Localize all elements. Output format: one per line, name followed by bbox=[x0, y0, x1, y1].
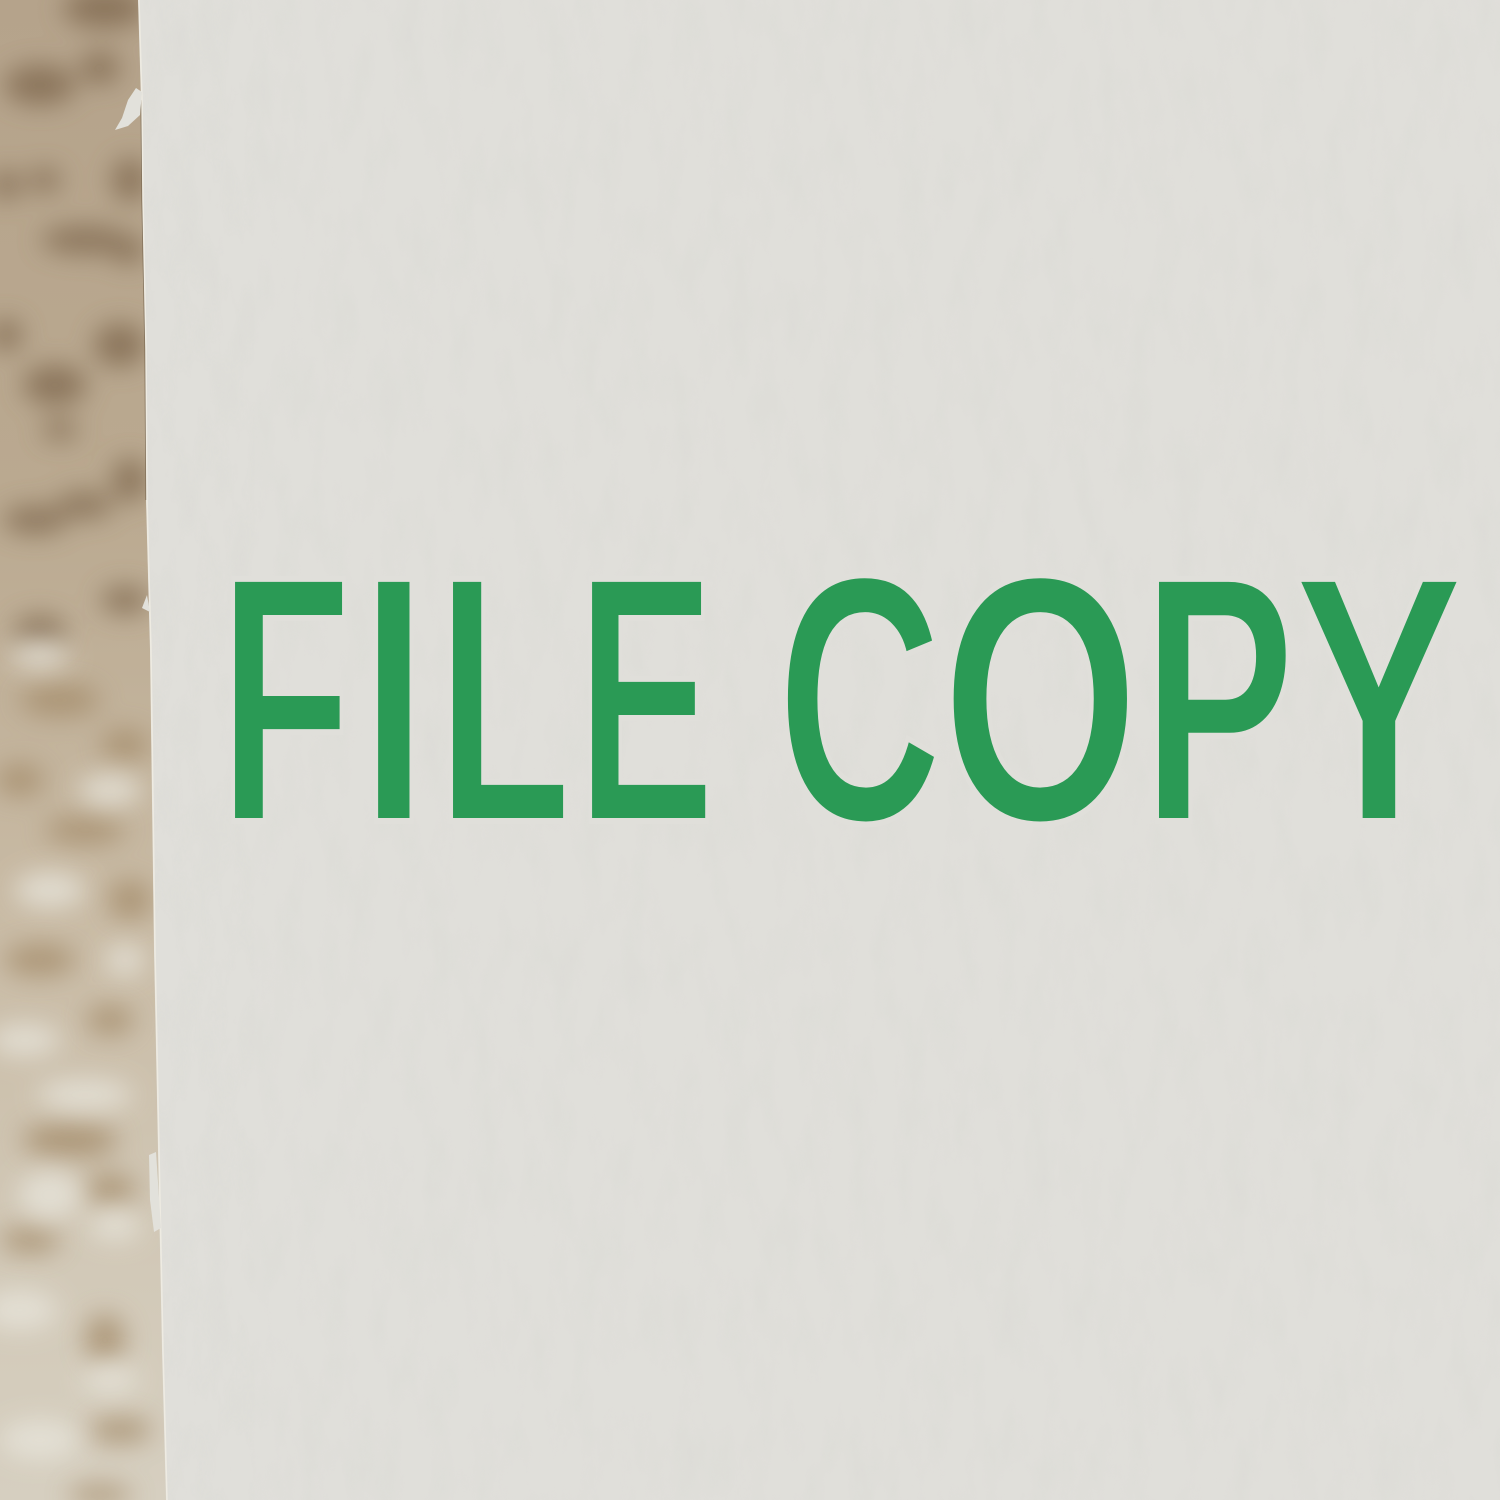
stamped text: FILE COPY: C bbox=[776, 502, 943, 896]
stamped text: FILE COPY: I bbox=[360, 502, 428, 896]
torn paper fibres bbox=[115, 88, 161, 1232]
stamped text: FILE COPY: F bbox=[219, 502, 352, 896]
stamped text: FILE COPY: E bbox=[576, 502, 715, 896]
stamped text: FILE COPY: O bbox=[941, 502, 1140, 896]
stamped text: FILE COPY: L bbox=[436, 502, 572, 896]
paper sheet bbox=[115, 0, 200, 1500]
background: textured brown surface bbox=[0, 0, 200, 1500]
stamped text: FILE COPY: P bbox=[1142, 502, 1296, 896]
